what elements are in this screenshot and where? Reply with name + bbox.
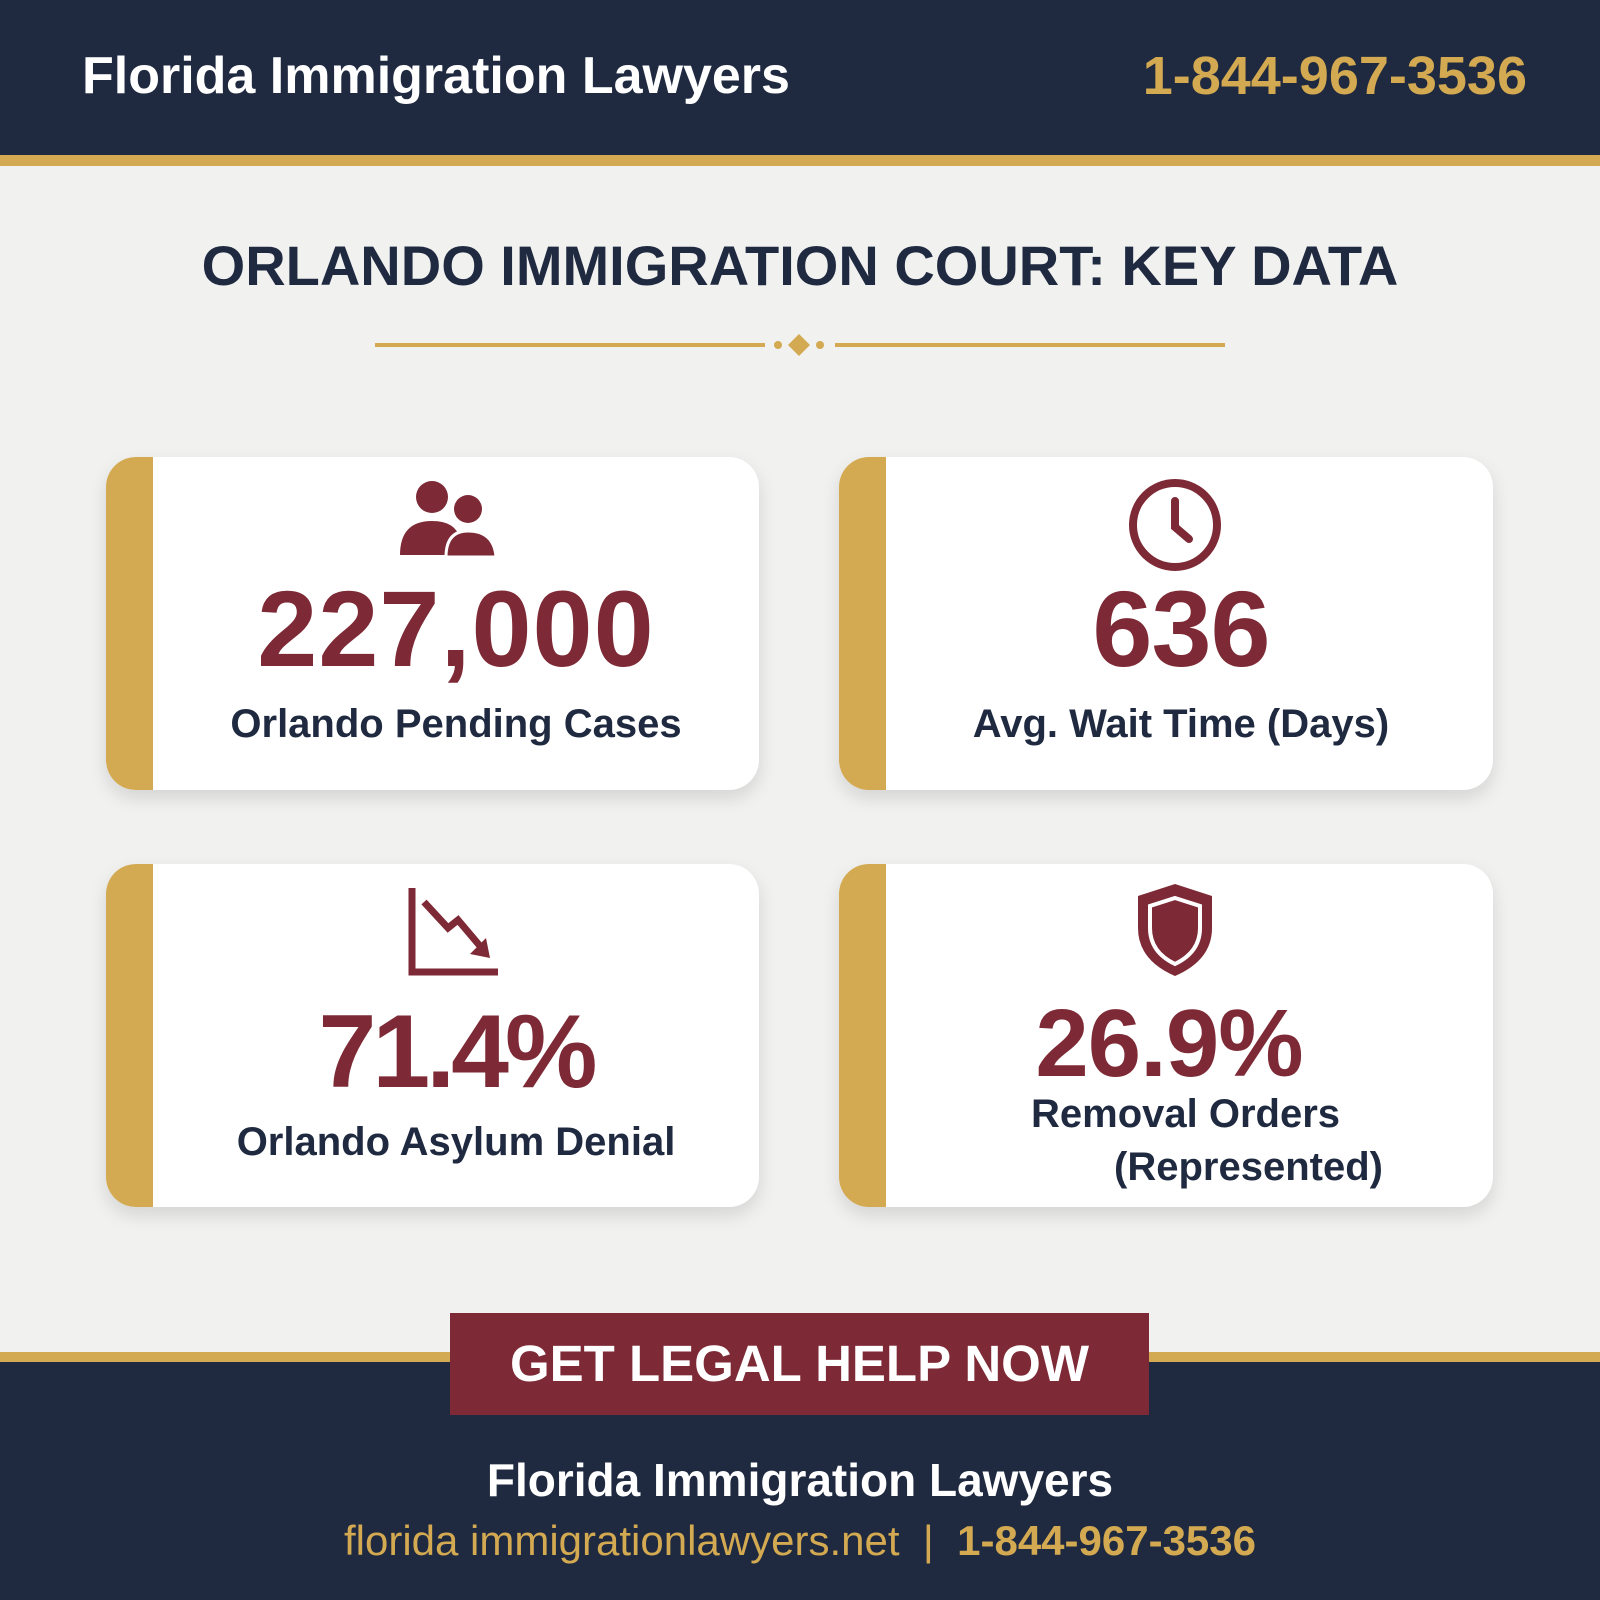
footer — [0, 1352, 1600, 1600]
icon: people — [400, 481, 494, 556]
footer name: Florida Immigration Lawyers — [487, 1454, 1113, 1506]
icon: declining chart — [408, 888, 498, 976]
CTA button — [450, 1313, 1149, 1415]
card: pending cases — [106, 457, 759, 790]
card: removal orders — [839, 864, 1493, 1207]
card: wait time — [839, 457, 1493, 790]
number: 636 — [1092, 568, 1270, 689]
label: Orlando Asylum Denial — [237, 1120, 675, 1164]
number: 71.4% — [319, 994, 593, 1110]
icon: clock — [1129, 479, 1221, 571]
label: Orlando Pending Cases — [230, 702, 682, 746]
footer contact: florida immigrationlawyers.net | 1-844-967-3536 — [344, 1517, 1256, 1564]
header phone: 1-844-967-3536 — [1143, 46, 1527, 106]
icon: shield — [1138, 884, 1212, 976]
card: asylum denial — [106, 864, 759, 1207]
number: 26.9% — [1035, 990, 1303, 1097]
label: Avg. Wait Time (Days) — [973, 702, 1389, 746]
number: 227,000 — [257, 568, 655, 689]
title divider — [375, 334, 1225, 356]
card: removal orders: (Represented) — [1114, 1145, 1383, 1189]
main title: ORLANDO IMMIGRATION COURT: KEY DATA — [202, 234, 1398, 297]
label: Removal Orders — [1031, 1092, 1340, 1136]
header title: Florida Immigration Lawyers — [82, 47, 790, 105]
CTA button: GET LEGAL HELP NOW — [510, 1335, 1089, 1392]
header bar — [0, 0, 1600, 166]
